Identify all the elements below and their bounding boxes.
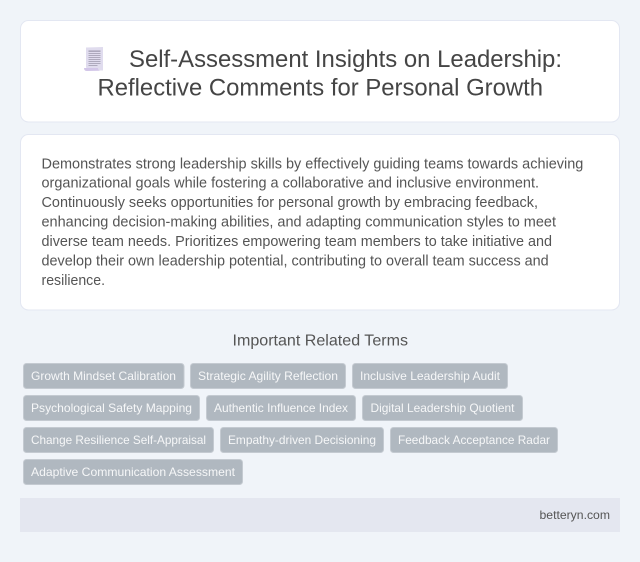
tag: Psychological Safety Mapping	[24, 396, 200, 420]
footer: site name: betteryn.com	[540, 508, 610, 522]
tag: Strategic Agility Reflection: Strategic Agility Reflection	[198, 369, 338, 383]
text block: summary: Demonstrates strong leadership skills by effectively guiding teams towards achieving	[42, 156, 583, 172]
tag: Change Resilience Self-Appraisal: Change Resilience Self-Appraisal	[31, 433, 206, 447]
tag: Empathy-driven Decisioning: Empathy-driven Decisioning	[228, 433, 376, 447]
tag: Strategic Agility Reflection	[190, 364, 346, 388]
title	[98, 46, 562, 102]
tag: Growth Mindset Calibration	[24, 364, 184, 388]
text block: summary: diverse team needs. Prioritizes empowering team members to take initiative and	[42, 234, 552, 250]
tag: Inclusive Leadership Audit: Inclusive Leadership Audit	[360, 369, 501, 383]
tag: Feedback Acceptance Radar: Feedback Acceptance Radar	[398, 433, 550, 447]
icon: document scroll	[84, 47, 103, 71]
tag: Authentic Influence Index: Authentic Influence Index	[214, 401, 348, 415]
text block: summary: enhancing decision-making abilities, and adapting communication styles to meet	[42, 214, 556, 230]
text block: summary: develop their own leadership potential, contributing to overall team success and	[42, 254, 549, 270]
tag: Inclusive Leadership Audit	[352, 364, 508, 388]
tag: Feedback Acceptance Radar	[390, 428, 558, 452]
tag: Change Resilience Self-Appraisal	[24, 428, 214, 452]
tag: Digital Leadership Quotient: Digital Leadership Quotient	[370, 401, 515, 415]
text block: summary	[42, 156, 583, 289]
tag: Adaptive Communication Assessment	[24, 460, 242, 484]
title: Reflective Comments for Personal Growth	[98, 74, 543, 102]
title: Self-Assessment Insights on Leadership:	[129, 46, 562, 73]
panel: summary card	[20, 134, 620, 310]
tag list	[24, 364, 558, 484]
heading: related terms: Important Related Terms	[232, 332, 408, 350]
text block: summary: resilience.	[42, 273, 105, 289]
tag: Authentic Influence Index	[206, 396, 356, 420]
text block: summary: Continuously seeks opportunities for personal growth by embracing feedback,	[42, 195, 538, 211]
footer bar	[20, 498, 620, 532]
tag: Digital Leadership Quotient	[362, 396, 522, 420]
panel: header card	[20, 20, 620, 122]
tag: Empathy-driven Decisioning	[220, 428, 384, 452]
text block: summary: organizational goals while fostering a collaborative and inclusive environment.	[42, 176, 539, 192]
tag: Growth Mindset Calibration: Growth Mindset Calibration	[31, 369, 176, 383]
tag: Psychological Safety Mapping: Psychological Safety Mapping	[31, 401, 192, 415]
tag: Adaptive Communication Assessment: Adaptive Communication Assessment	[31, 465, 236, 479]
